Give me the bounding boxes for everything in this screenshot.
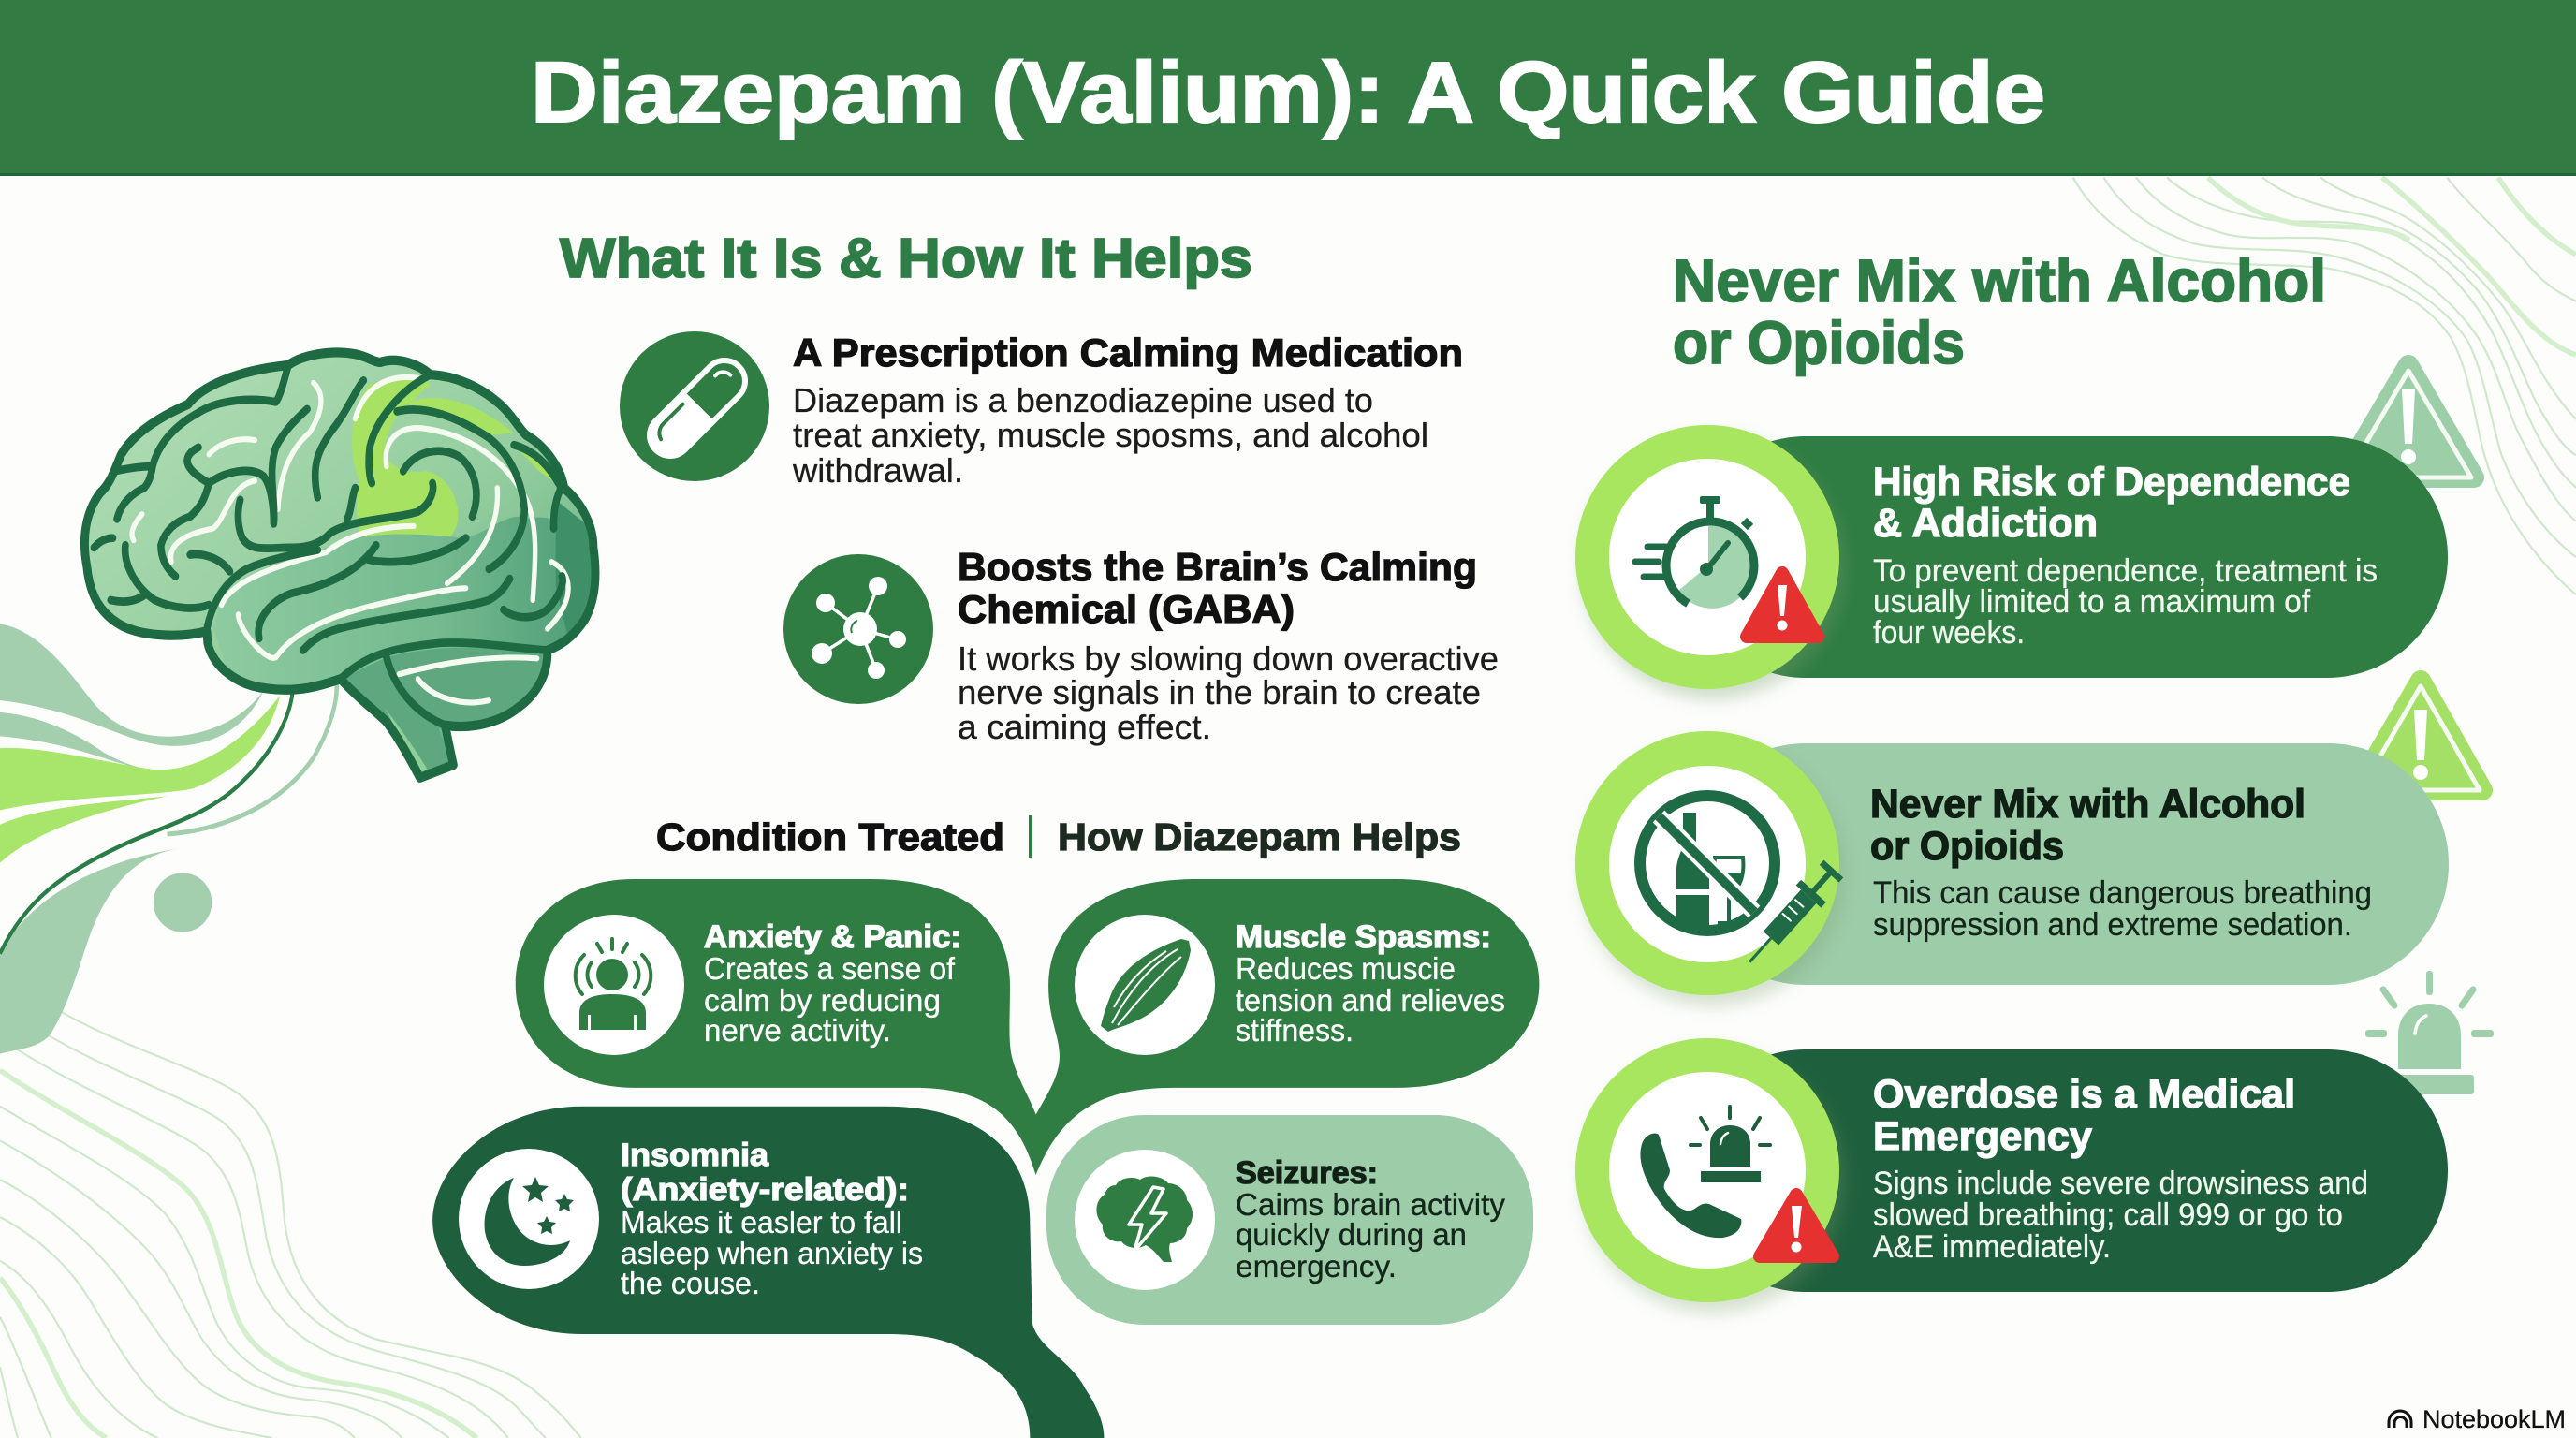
text: seizures: Caims brain activity (1236, 1187, 1506, 1222)
panel: overdose emergency (1575, 1038, 2448, 1313)
NotebookLM watermark: NotebookLM (2422, 1405, 2566, 1433)
text: prescription description: treat anxiety, muscle sposms, and alcohol (793, 416, 1428, 454)
text: anxiety: calm by reducing (704, 983, 941, 1018)
card: seizures (1075, 1150, 1506, 1290)
title: Diazepam (Valium): A Quick Guide (531, 45, 2045, 140)
text: overdose: A&E immediately. (1873, 1229, 2111, 1265)
text: overdose (1873, 1072, 2368, 1265)
tree shape: anxiety and muscle cards (516, 879, 1539, 1175)
icon: anxious person (544, 915, 684, 1055)
text: seizures: quickly during an (1236, 1217, 1467, 1252)
flowing ribbons behind the brain (0, 624, 337, 1054)
heading: GABA: Boosts the Brain’s Calming (958, 545, 1477, 589)
panel: never mix warning (1575, 731, 2449, 1006)
text: insomnia: Insomnia (621, 1137, 769, 1173)
card: muscle spasms (1075, 915, 1505, 1055)
text: overdose: Overdose is a Medical (1873, 1072, 2295, 1117)
heading: never mix (1673, 247, 2326, 376)
text: anxiety: Anxiety & Panic: (704, 919, 961, 955)
text: never mix: or Opioids (1870, 824, 2064, 869)
text: dependence: High Risk of Dependence (1873, 460, 2350, 505)
text: muscle: stiffness. (1236, 1013, 1354, 1048)
text: dependence: four weeks. (1873, 615, 2025, 651)
heading: GABA (958, 545, 1477, 631)
text: seizures: Seizures: (1236, 1155, 1378, 1191)
heading: conditions table: Condition Treated (656, 815, 1004, 858)
text: never mix (1870, 782, 2372, 943)
text: never mix: Never Mix with Alcohol (1870, 782, 2305, 827)
text: GABA description: a caiming effect. (958, 708, 1211, 746)
tree shape: insomnia card and trunk (432, 1107, 1104, 1438)
text: overdose: slowed breathing; call 999 or go to (1873, 1197, 2343, 1233)
text: anxiety: Creates a sense of (704, 951, 956, 986)
icon: background warning triangle 2 (2357, 681, 2482, 790)
text: insomnia: the couse. (621, 1266, 760, 1300)
text: never mix: This can cause dangerous breathing (1873, 875, 2372, 911)
heading: prescription: A Prescription Calming Medication (793, 330, 1463, 374)
text: overdose: Signs include severe drowsiness and (1873, 1166, 2368, 1201)
heading: never mix: Never Mix with Alcohol (1673, 247, 2326, 315)
text: GABA description (958, 639, 1499, 746)
heading: what it is: What It Is & How It Helps (560, 227, 1252, 289)
card: anxiety and panic (544, 915, 961, 1055)
card: insomnia (459, 1137, 923, 1300)
icon: phone and beacon with warning (1640, 1107, 1833, 1256)
text: dependence: usually limited to a maximum of (1873, 584, 2311, 620)
text: prescription description: Diazepam is a benzodiazepine used to (793, 381, 1373, 419)
brain illustration (84, 353, 597, 778)
icon: moon and stars (459, 1149, 599, 1289)
heading: GABA: Chemical (GABA) (958, 587, 1295, 631)
text: muscle (1236, 919, 1505, 1048)
icon: muscle (1075, 915, 1215, 1055)
text: dependence: To prevent dependence, treatment is (1873, 553, 2378, 589)
icon: background warning triangle 1 (2342, 365, 2474, 477)
header banner (0, 0, 2576, 176)
heading: never mix: or Opioids (1673, 309, 1965, 376)
text: GABA description: nerve signals in the brain to create (958, 673, 1481, 712)
text: anxiety: nerve activity. (704, 1013, 891, 1048)
text: seizures: emergency. (1236, 1249, 1397, 1284)
text: dependence: & Addiction (1873, 501, 2098, 546)
text: insomnia: (Anxiety-related): (621, 1172, 909, 1208)
text: insomnia: asleep when anxiety is (621, 1236, 923, 1270)
card: seizures background (1046, 1115, 1533, 1325)
icon: pill (620, 331, 769, 481)
text: insomnia: Makes it easler to fall (621, 1205, 902, 1240)
icon: brain with lightning (1075, 1150, 1215, 1290)
icon: stopwatch with warning (1635, 496, 1818, 637)
text: prescription description: withdrawal. (792, 451, 963, 490)
block: GABA (783, 545, 1499, 746)
text: never mix: suppression and extreme sedation. (1873, 907, 2352, 943)
icon: background beacon (2365, 971, 2494, 1094)
text: muscle: tension and relieves (1236, 983, 1505, 1018)
heading: conditions table (656, 815, 1461, 858)
text: muscle: Reduces muscie (1236, 951, 1456, 986)
text: prescription description (792, 381, 1428, 490)
text: GABA description: It works by slowing down overactive (958, 639, 1499, 678)
text: muscle: Muscle Spasms: (1236, 919, 1491, 955)
block: prescription medication (620, 330, 1463, 490)
panel: dependence risk (1575, 425, 2448, 699)
text: seizures (1236, 1155, 1506, 1284)
icon: molecule (783, 554, 933, 704)
text: overdose: Emergency (1873, 1114, 2092, 1159)
text: insomnia (621, 1137, 923, 1300)
heading: conditions table: How Diazepam Helps (1058, 815, 1461, 858)
text: anxiety (704, 919, 961, 1048)
text: dependence (1873, 460, 2378, 651)
icon: no alcohol and syringe (1640, 796, 1846, 974)
